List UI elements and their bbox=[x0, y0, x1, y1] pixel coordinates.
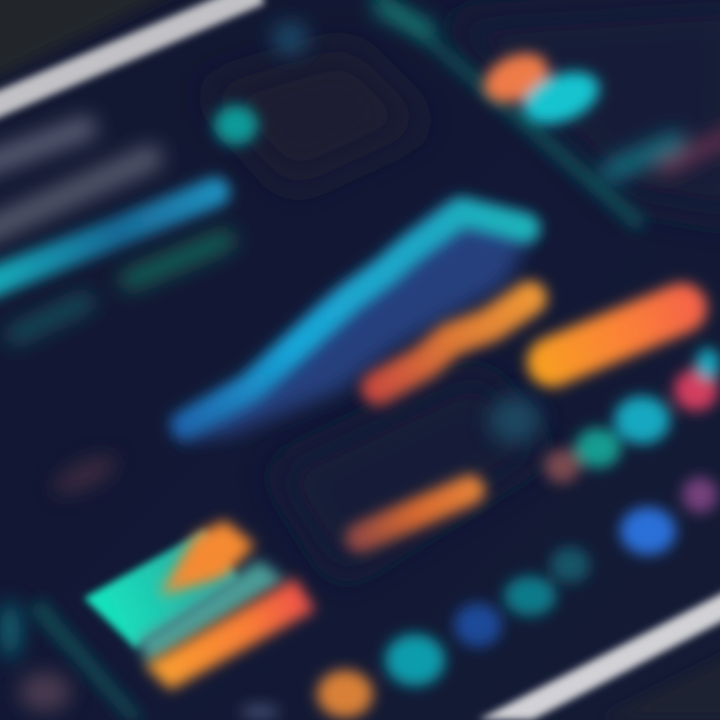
lower orange bar bbox=[360, 490, 470, 538]
area chart fill bbox=[175, 205, 535, 440]
orange-red trend strip bbox=[378, 298, 530, 388]
bottom-right dark corner bbox=[600, 640, 720, 720]
left panel grey text bars bbox=[0, 128, 225, 335]
left teal-blue band bbox=[0, 192, 215, 285]
card orange-red stripe bbox=[145, 578, 315, 690]
area chart top edge bbox=[185, 212, 525, 425]
bottom-left faint blobs bbox=[0, 396, 541, 712]
row of status dots bbox=[240, 348, 720, 720]
top-right faint chart lines bbox=[380, 8, 720, 172]
top-right orange and cyan pills bbox=[476, 44, 607, 134]
bottom-right white strip bbox=[478, 584, 720, 720]
teal dot top bbox=[214, 105, 258, 145]
area chart bbox=[175, 205, 535, 440]
card orange block bbox=[160, 520, 255, 595]
bottom-left colour card bbox=[84, 520, 315, 690]
card teal stripe bbox=[135, 560, 285, 665]
dim blue dot top bbox=[272, 22, 308, 54]
card green block bbox=[84, 530, 240, 648]
center-bottom panel shade bbox=[270, 370, 550, 580]
top-left white strip bbox=[0, 0, 260, 112]
large orange bar bbox=[552, 308, 682, 362]
top-right panel shade bbox=[440, 0, 720, 220]
center-top panel shade bbox=[200, 45, 430, 190]
top-left dark corner bbox=[0, 0, 240, 95]
